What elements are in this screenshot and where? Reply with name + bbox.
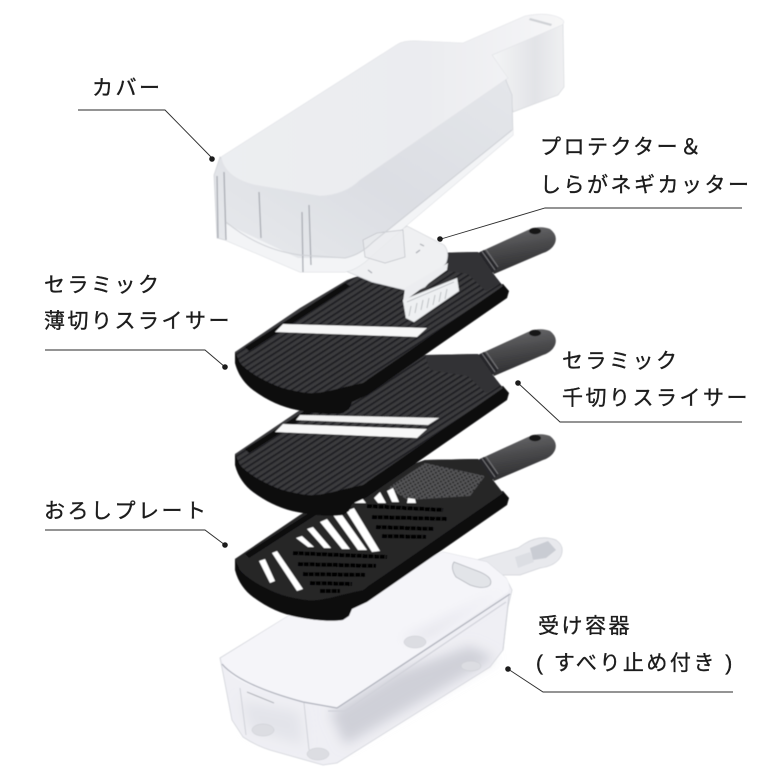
white slots bbox=[259, 488, 416, 591]
protector and green onion cutter bbox=[343, 226, 459, 322]
container body bbox=[220, 552, 512, 765]
label: ceramic julienne slicer: セラミック bbox=[562, 350, 680, 373]
label: ceramic julienne slicer: 千切りスライサー bbox=[562, 387, 750, 410]
cover top face bbox=[221, 14, 564, 196]
label: cover: カバー bbox=[92, 77, 162, 100]
leader lines and callout dots bbox=[45, 110, 742, 692]
label: receiving container: ( すべり止め付き ) bbox=[536, 652, 735, 675]
protector stem bbox=[363, 230, 405, 263]
thin slicer bbox=[235, 227, 556, 414]
grater plate bbox=[235, 434, 556, 621]
plate holes bbox=[352, 244, 424, 273]
container handle bbox=[470, 538, 562, 575]
container top opening bbox=[221, 552, 509, 708]
dark tooth rows bbox=[293, 506, 447, 591]
cover ribs bbox=[217, 172, 311, 272]
handle hanging part bbox=[492, 24, 564, 112]
container tab bbox=[452, 562, 491, 588]
label: ceramic thin slicer: セラミック bbox=[44, 274, 162, 297]
straight blade bbox=[275, 424, 427, 438]
container inner shading bbox=[330, 646, 495, 745]
label: protector and green onion cutter: しらがネギカッター bbox=[540, 174, 752, 197]
label: grater plate: おろしプレート bbox=[44, 500, 208, 523]
plate surface bbox=[235, 459, 503, 600]
cover side walls bbox=[214, 78, 513, 272]
serrated blade bbox=[296, 415, 439, 425]
blade bbox=[275, 324, 427, 337]
label: ceramic thin slicer: 薄切りスライサー bbox=[44, 310, 232, 333]
handle slot bbox=[529, 18, 552, 26]
julienne slicer bbox=[235, 329, 556, 516]
comb cutter bbox=[403, 278, 459, 322]
receiving container bbox=[220, 538, 562, 765]
fine grater area bbox=[388, 463, 485, 500]
label: receiving container: 受け容器 bbox=[538, 615, 632, 638]
non-slip feet bbox=[252, 636, 481, 760]
cover front flange bbox=[225, 130, 513, 272]
container rim bbox=[222, 594, 510, 708]
label: protector and green onion cutter: プロテクター＆ bbox=[540, 136, 704, 159]
protector plate bbox=[343, 226, 448, 291]
cover bbox=[214, 14, 564, 272]
illustration: exploded product stack bbox=[214, 14, 564, 765]
